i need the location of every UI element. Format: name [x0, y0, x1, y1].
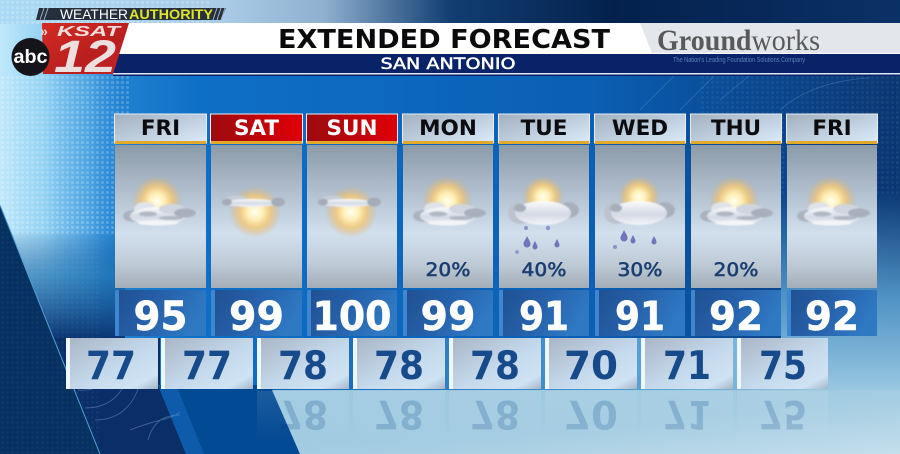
- low: 71: 71: [663, 343, 711, 389]
- column: Wednesday: [594, 114, 686, 340]
- high temperature: [211, 290, 302, 340]
- low: 78: 78: [278, 343, 328, 389]
- station logo: KSAT 12: KSAT: [57, 23, 123, 40]
- high temperature: 91: [519, 292, 569, 340]
- day header: SAT: [234, 116, 279, 141]
- low: 70: 70: [564, 343, 618, 389]
- low: 77: [66, 338, 158, 389]
- icon: partly cloudy: [700, 176, 773, 226]
- day header: FRI: [141, 116, 180, 141]
- day header: FRI: [812, 116, 852, 141]
- icon: mostly sunny: [222, 186, 285, 238]
- station logo: KSAT 12: »: [40, 23, 48, 39]
- high temperature: [691, 290, 781, 340]
- icon: rain and sun: [604, 176, 675, 249]
- day header: SUN: [327, 116, 377, 141]
- day header: [786, 114, 878, 144]
- high temperature: 95: [134, 292, 188, 340]
- low: 70: [545, 338, 637, 389]
- column: Thursday: [690, 114, 782, 340]
- day header: [402, 114, 494, 144]
- low: 77: 77: [182, 343, 232, 389]
- high temperature: [403, 290, 493, 340]
- low: 78: 78: [374, 343, 424, 389]
- high temperature: 99: [420, 292, 476, 340]
- forecast panel: [691, 145, 781, 288]
- low: 77: 77: [86, 343, 136, 389]
- precipitation chance: 30%: [618, 260, 662, 281]
- high temperature: 91: [615, 292, 665, 340]
- column: Monday: [402, 114, 494, 340]
- weather authority bar: [36, 6, 226, 22]
- high temperature: 92: [709, 292, 763, 340]
- high temperature: [115, 290, 206, 340]
- precipitation chance: 20%: [426, 260, 470, 281]
- icon: partly cloudy: [413, 176, 486, 226]
- day header: [210, 114, 302, 144]
- high temperature: 100: [312, 292, 392, 340]
- forecast panel: [307, 145, 397, 288]
- forecast panel: [499, 145, 589, 288]
- weather authority bar: WEATHER: [60, 6, 128, 22]
- day header: WED: [612, 116, 668, 141]
- low temperature reflections: 71: [663, 391, 711, 437]
- low temperature reflections: 78: [470, 391, 520, 437]
- forecast panel: [211, 145, 302, 288]
- column: Saturday: [210, 114, 302, 340]
- station logo: KSAT 12: [40, 23, 129, 82]
- header band: [110, 23, 900, 76]
- icon: rain and sun: [508, 176, 579, 254]
- day header: [306, 114, 398, 144]
- title: EXTENDED FORECAST: [278, 25, 610, 55]
- station logo: KSAT 12: 12: [54, 31, 116, 82]
- sponsor logo: Groundworks: The Nation's Leading Foundation Solutions Company: [673, 55, 805, 64]
- day header: THU: [711, 116, 761, 141]
- day header: MON: [419, 116, 477, 141]
- icon: partly cloudy: [797, 176, 870, 226]
- abc logo: abc: [14, 47, 48, 68]
- low: 71: [641, 338, 733, 389]
- sponsor logo: Groundworks: Groundworks: [657, 24, 820, 57]
- column: next Friday: [786, 114, 878, 340]
- day header: TUE: [521, 116, 567, 141]
- low temperature reflections: 70: [564, 391, 618, 437]
- low: 75: [737, 338, 828, 389]
- day header: [690, 114, 782, 144]
- column: Friday: [114, 114, 206, 340]
- icon: mostly sunny: [318, 186, 381, 238]
- forecast panel: [403, 145, 493, 288]
- high temperature: [787, 290, 877, 340]
- low temperature row: [66, 338, 828, 389]
- low: 78: [257, 338, 349, 389]
- precipitation chance: 40%: [522, 260, 566, 281]
- day header: [594, 114, 686, 144]
- forecast panel: [595, 145, 685, 288]
- low temperature reflections: 75: [759, 391, 807, 437]
- column: Tuesday: [498, 114, 590, 340]
- subtitle: SAN ANTONIO: [380, 54, 516, 73]
- high temperature: 99: [229, 292, 284, 340]
- column: Sunday: [306, 114, 398, 340]
- day header: [498, 114, 590, 144]
- low temperature reflections: [257, 391, 828, 441]
- low: 75: 75: [759, 343, 807, 389]
- low: 78: 78: [470, 343, 520, 389]
- low temperature reflections: 78: [374, 391, 424, 437]
- precipitation chance: 20%: [714, 260, 758, 281]
- weather authority bar: AUTHORITY: [129, 6, 214, 22]
- high temperature: [595, 290, 685, 340]
- abc logo: [12, 38, 50, 76]
- day header: [114, 114, 206, 144]
- high temperature: [499, 290, 589, 340]
- low: 78: [353, 338, 445, 389]
- low: 78: [449, 338, 541, 389]
- forecast panel: [787, 145, 877, 288]
- icon: partly cloudy: [123, 176, 196, 226]
- low: 77: [161, 338, 253, 389]
- high temperature: 92: [805, 292, 859, 340]
- low temperature reflections: 78: [278, 391, 328, 437]
- forecast panel: [115, 145, 206, 288]
